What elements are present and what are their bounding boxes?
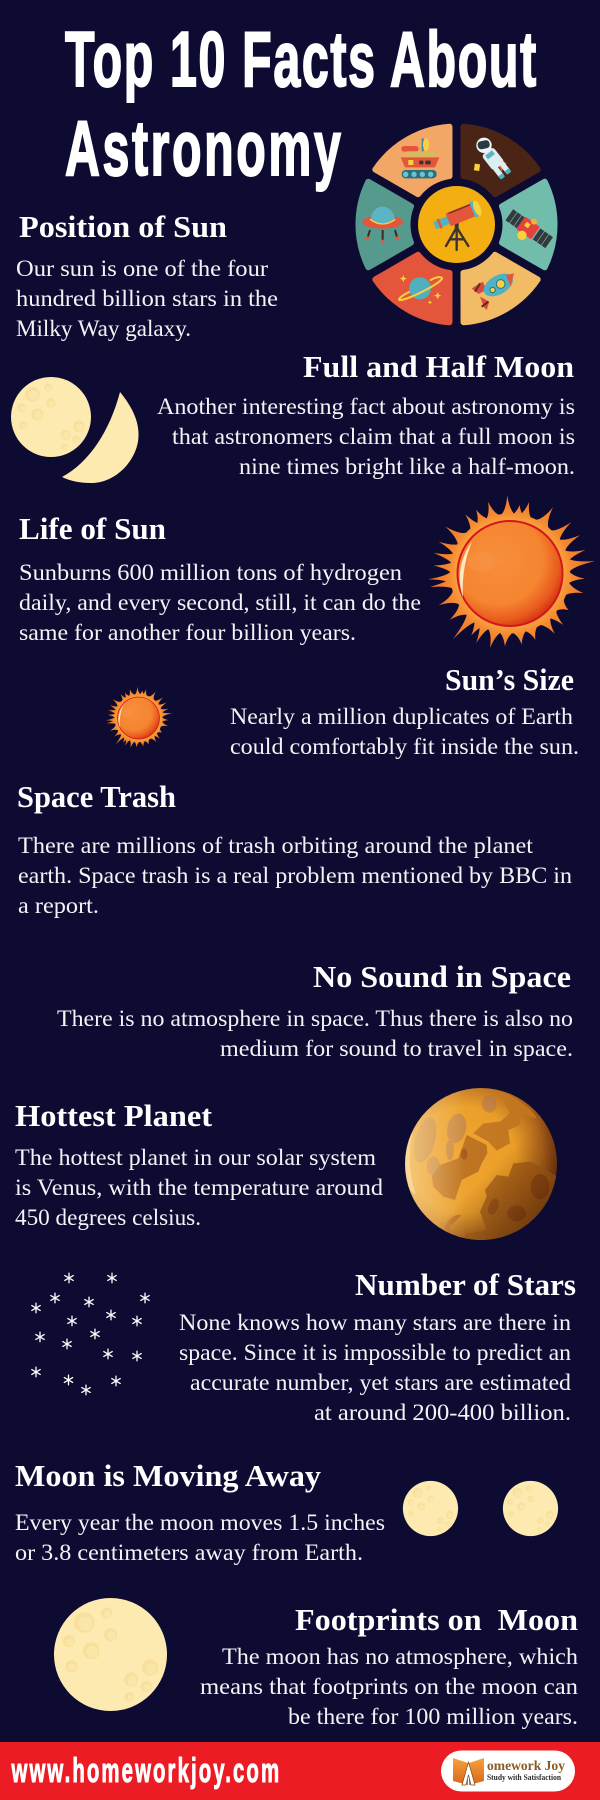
panel: position of sun — [16, 209, 278, 342]
icon: moon one — [403, 1481, 458, 1536]
text: life of sun: daily, and every second, still, it can do the — [19, 590, 421, 616]
title: Astronomy — [65, 104, 341, 192]
text: life of sun — [19, 560, 421, 646]
text: space trash: earth. Space trash is a real problem mentioned by BBC in — [18, 863, 572, 889]
heading: sun's size: Sun’s Size — [445, 662, 574, 697]
text: hottest planet: 450 degrees celsius. — [15, 1205, 201, 1231]
title — [65, 15, 536, 192]
icon: moon two — [503, 1481, 558, 1536]
heading: no sound in space: No Sound in Space — [313, 959, 571, 994]
icon: book — [453, 1758, 484, 1785]
text: number of stars — [179, 1310, 571, 1426]
text: no sound in space: There is no atmosphere in space. Thus there is also no — [57, 1006, 573, 1032]
website url: www.homeworkjoy.com — [11, 1752, 279, 1789]
text: position of sun: Milky Way galaxy. — [16, 316, 191, 342]
text: footprints on moon: be there for 100 million years. — [288, 1704, 578, 1730]
icon: full moon — [11, 377, 91, 457]
panel: space trash — [17, 779, 572, 919]
heading: number of stars: Number of Stars — [355, 1267, 576, 1302]
heading: hottest planet: Hottest Planet — [15, 1098, 213, 1133]
text: footprints on moon: The moon has no atmosphere, which — [222, 1644, 578, 1670]
text: full and half moon — [157, 394, 575, 480]
heading: full and half moon: Full and Half Moon — [303, 349, 574, 384]
icon: venus — [405, 1088, 563, 1243]
text: number of stars: accurate number, yet stars are estimated — [190, 1370, 571, 1396]
panel: footprints on moon — [54, 1598, 578, 1730]
text: no sound in space — [57, 1006, 573, 1062]
panel: full and half moon — [11, 349, 575, 483]
panel: no sound in space — [57, 959, 573, 1062]
icon: rocket — [472, 269, 517, 310]
text: full and half moon: that astronomers claim that a full moon is — [172, 424, 575, 450]
panel: life of sun — [19, 495, 596, 650]
heading: footprints on moon: Footprints on Moon — [295, 1602, 578, 1637]
text: moon is moving away — [15, 1510, 385, 1566]
text: footprints on moon — [200, 1644, 578, 1730]
text: number of stars: at around 200-400 billion. — [314, 1400, 571, 1426]
icon: scattered stars — [32, 1273, 149, 1395]
logo: homework joy — [441, 1750, 575, 1792]
panel: hottest planet — [15, 1088, 563, 1243]
text: hottest planet: The hottest planet in our solar system — [15, 1145, 376, 1171]
heading: position of sun: Position of Sun — [19, 209, 227, 244]
text: moon is moving away: Every year the moon moves 1.5 inches — [15, 1510, 385, 1536]
text: life of sun: Sunburns 600 million tons of hydrogen — [19, 560, 402, 586]
text: number of stars: space. Since it is impossible to predict an — [179, 1340, 571, 1366]
panel: sun's size — [106, 662, 579, 760]
text: position of sun: hundred billion stars in the — [16, 286, 278, 312]
text: hottest planet: is Venus, with the temperature around — [15, 1175, 383, 1201]
footer band — [0, 1742, 600, 1800]
panel: moon is moving away — [15, 1458, 558, 1566]
text: life of sun: same for another four billion years. — [19, 620, 356, 646]
icon: large sun — [428, 495, 596, 650]
icon: half moon — [62, 392, 139, 483]
heading: space trash: Space Trash — [17, 779, 176, 814]
icon: rover — [401, 138, 439, 178]
text: full and half moon: nine times bright like a half-moon. — [239, 454, 575, 480]
icon: small sun — [106, 687, 173, 749]
text: position of sun — [16, 256, 278, 342]
text: sun's size: could comfortably fit inside the sun. — [230, 734, 579, 760]
text: sun's size: Nearly a million duplicates of Earth — [230, 704, 573, 730]
text: moon is moving away: or 3.8 centimeters away from Earth. — [15, 1540, 363, 1566]
text: footprints on moon: means that footprints on the moon can — [200, 1674, 578, 1700]
icon: ufo — [362, 207, 403, 243]
icon: ringed planet — [399, 275, 442, 305]
text: space trash — [18, 833, 572, 919]
icon: astronaut — [474, 138, 512, 180]
text: sun's size — [230, 704, 579, 760]
panel: number of stars — [32, 1267, 576, 1426]
text: space trash: There are millions of trash orbiting around the planet — [18, 833, 533, 859]
logo wordmark: omework Joy — [487, 1759, 565, 1774]
icon: large moon — [54, 1598, 167, 1711]
logo tagline: Study with Satisfaction — [487, 1773, 562, 1782]
text: full and half moon: Another interesting fact about astronomy is — [157, 394, 575, 420]
heading: life of sun: Life of Sun — [19, 511, 166, 546]
text: hottest planet — [15, 1145, 383, 1231]
text: number of stars: None knows how many stars are there in — [179, 1310, 571, 1336]
icon: satellite — [505, 208, 554, 249]
text: no sound in space: medium for sound to travel in space. — [220, 1036, 573, 1062]
text: position of sun: Our sun is one of the four — [16, 256, 268, 282]
heading: moon is moving away: Moon is Moving Away — [15, 1458, 322, 1493]
icon: telescope — [431, 199, 483, 250]
title: Top 10 Facts About — [65, 15, 536, 103]
text: space trash: a report. — [18, 893, 99, 919]
icon wheel: space exploration — [358, 118, 555, 331]
